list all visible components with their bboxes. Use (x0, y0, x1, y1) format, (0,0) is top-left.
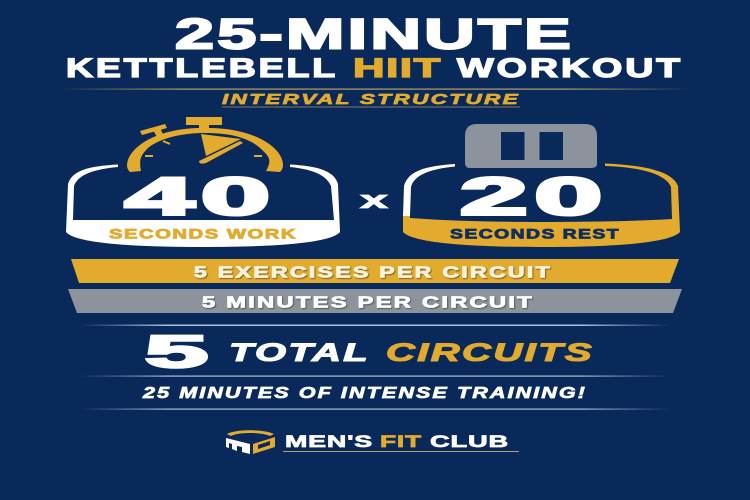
banner: 5 exercises per circuit (71, 259, 679, 283)
logo wordmark: MEN'S (285, 433, 373, 451)
icon: logo mark (226, 430, 275, 454)
banner: 5 exercises per circuit: 5 EXERCISES PER CIRCUIT (194, 264, 552, 282)
label: seconds work: SECONDS WORK (109, 226, 297, 242)
title: 25-MINUTE (175, 10, 574, 58)
callout: 5 total circuits: 5 (145, 326, 208, 377)
label: seconds rest: SECONDS REST (450, 226, 620, 242)
multiply sign: x (360, 187, 389, 214)
heading: interval structure: INTERVAL STRUCTURE (222, 91, 520, 108)
title: WORKOUT (457, 53, 683, 83)
callout: 5 total circuits: CIRCUITS (386, 339, 594, 367)
panel: 40 seconds work (66, 164, 340, 247)
title (66, 10, 683, 83)
callout: 5 total circuits: TOTAL (229, 339, 370, 367)
icon: pause button (465, 124, 597, 168)
big number 40: 40 (125, 168, 277, 226)
logo wordmark (285, 433, 509, 451)
panel: 20 seconds rest (403, 164, 680, 247)
icon: stopwatch (127, 117, 283, 172)
text: 25 minutes of intense training: 25 MINUTES OF INTENSE TRAINING! (142, 385, 587, 402)
banner: 5 minutes per circuit: 5 MINUTES PER CIRCUIT (202, 294, 534, 312)
banner: 5 minutes per circuit (68, 289, 682, 313)
logo wordmark: CLUB (430, 433, 509, 451)
title: KETTLEBELL (66, 53, 338, 83)
big number 20: 20 (460, 168, 609, 226)
title: HIIT (353, 53, 442, 83)
logo: men's fit club (226, 430, 519, 454)
logo wordmark: FIT (380, 433, 422, 451)
callout: 5 total circuits (145, 326, 594, 377)
